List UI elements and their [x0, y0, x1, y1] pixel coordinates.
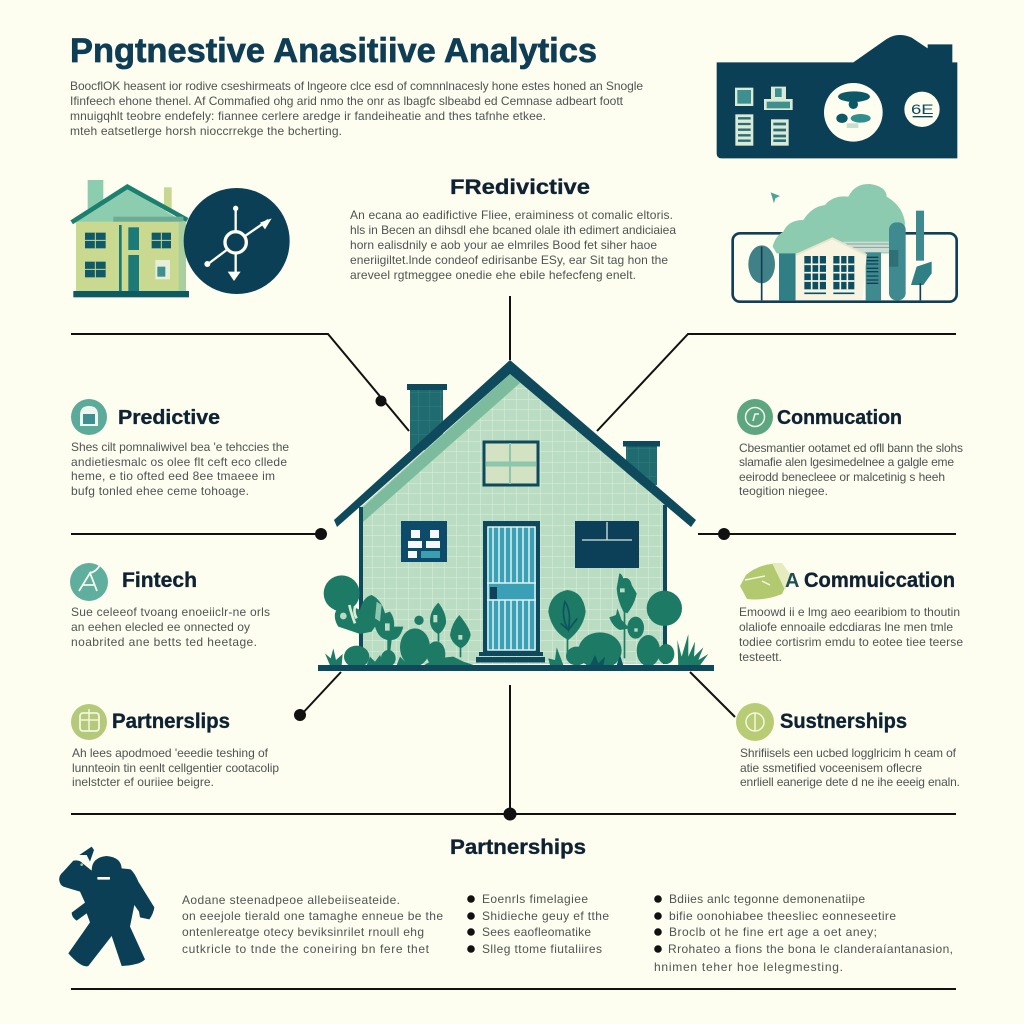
bullet list two — [654, 892, 953, 974]
icon: running figure silhouette — [59, 847, 154, 966]
body text — [182, 893, 443, 956]
body text: todiee cortisrim emdu to eotee tiee teerse — [739, 635, 963, 649]
wall — [361, 374, 665, 664]
paragraph: An ecana ao eadifictive Fliee, eraiminess ot comalic eltoris. — [350, 208, 673, 222]
body text: Ah lees apodmoed 'eeedie teshing of — [72, 746, 269, 760]
heading: Partnerslips — [112, 710, 230, 733]
paragraph: hls in Becen an dihsdl ehe bcaned olale ith edimert andiciaiea — [350, 223, 676, 237]
icon: A mark — [70, 563, 108, 601]
body text: Cbesmantier ootamet ed ofll bann the slohs — [739, 441, 963, 455]
bullet list one — [467, 892, 609, 956]
bullet list one: Shidieche geuy ef tthe — [482, 909, 609, 923]
body text: andietiesmalc os olee flt ceft eco cllede — [71, 455, 287, 469]
heading: Commuiccation — [804, 569, 955, 592]
icon: scene with cloud, building and trees — [733, 184, 957, 302]
roof — [334, 360, 696, 527]
heading: Partnerships — [450, 836, 586, 859]
title: Pngtnestive Anasitiive Analytics — [70, 32, 597, 70]
body text: Shes cilt pomnaliwivel bea 'e tehccies the — [71, 440, 289, 454]
panel: Partnerslips — [71, 704, 279, 789]
body text: ontenlereatge otecy beviksinrilet rnoull ehg — [182, 925, 424, 939]
heading: Conmucation — [777, 406, 902, 429]
bullet list two: bifie oonohiabee theesliec eonneseetire — [669, 909, 896, 923]
body text — [71, 605, 270, 649]
right window — [575, 521, 639, 568]
bullet list one: Eoenrls fimelagiee — [482, 892, 588, 906]
panel: Conmucation — [737, 399, 963, 498]
body text: Sue celeeof tvoang enoeiiclr-ne orls — [71, 605, 270, 619]
body text: inelstcter ef ouriiee beigre. — [72, 775, 214, 789]
body text — [72, 746, 279, 789]
panel: Fintech — [70, 563, 270, 649]
body text — [740, 746, 960, 789]
icon: dark banner with house roofline: 6E — [911, 101, 934, 117]
body text — [71, 440, 289, 498]
body text: cutkricle to tnde the coneiring bn fere thet — [182, 942, 430, 956]
body text: atie ssmetified voceenisem oflecre — [740, 761, 922, 775]
panel: Sustnerships — [736, 703, 960, 789]
body text — [739, 441, 963, 498]
paragraph: areveel rgtmeggee onedie ehe ebile hefecfeng enelt. — [350, 268, 636, 282]
icon: olive house blob: A — [785, 570, 799, 592]
body text: olaliofe ennoaile edcdiaras lne men tmle — [739, 620, 953, 634]
body text: Aodane steenadpeoe allebeiiseateide. — [182, 893, 400, 907]
icon: circled bar — [736, 703, 774, 741]
door — [483, 521, 540, 653]
body text: teogition niegee. — [739, 484, 828, 498]
header block — [70, 32, 643, 138]
heading: Predictive — [118, 406, 220, 429]
heading: Fintech — [122, 569, 197, 592]
central house illustration — [318, 360, 714, 671]
body text: bufg tonled ehee ceme tohoage. — [71, 484, 249, 498]
icon: olive house blob — [740, 563, 799, 599]
icon: box — [71, 704, 107, 740]
plants: right of door — [548, 573, 708, 669]
chimneys — [407, 384, 660, 485]
intro paragraph — [70, 79, 643, 138]
icon: compass circle and green house — [72, 180, 290, 297]
bullet list one: Slleg ttome fiutaliires — [482, 942, 602, 956]
body text: enrliell eanerige dete d ne ihe eeeig enaln. — [740, 775, 960, 789]
left window — [401, 521, 447, 562]
connector lines — [71, 296, 956, 989]
panel: Predictive — [71, 399, 289, 498]
body text: an eehen elecled ee onnected oy — [71, 620, 250, 634]
bullet list two: hnimen teher hoe lelegmesting. — [654, 960, 843, 974]
body text: heme, e tio ofted eed 8ee tmaeee im — [71, 469, 275, 483]
paragraph — [350, 208, 676, 282]
body text: Emoowd ii e lmg aeo eearibiom to thoutin — [739, 605, 960, 619]
bullet list one: Sees eaofleomatike — [482, 925, 591, 939]
body text: Shrifiisels een ucbed logglricim h ceam of — [740, 746, 957, 760]
wall edges — [361, 505, 665, 664]
roof underside shading — [363, 374, 520, 522]
plants: left of door — [324, 575, 475, 668]
body text: noabrited ane betts ted heetage. — [71, 635, 257, 649]
panel: Partnerships footer — [59, 836, 953, 974]
intro paragraph: Ifinfeech ehone thenel. Af Commafied ohg arid nmo the onr as lbagfc slbeabd ed Cemnase adbeart foott — [70, 94, 624, 108]
paragraph: eneriigiltet.lnde condeof edirisanbe ESy, ear Sit tag hon the — [350, 253, 668, 267]
intro paragraph: BoocflOK heasent ior rodive cseshirmeats of lngeore clce esd of comnnlnacesly hone estes honed an Snogle — [70, 79, 643, 93]
ground — [318, 665, 714, 671]
icon: arch — [71, 399, 107, 435]
panel: Commuiccation — [739, 563, 963, 664]
bullet list two: Broclb ot he fine ert age a oet aney; — [669, 925, 877, 939]
intro paragraph: mnuigqhlt teobre endefely: fiannee cerlere aredge ir fandeiheatie and thes tafnhe etkee. — [70, 109, 546, 123]
body text: testeett. — [739, 650, 782, 664]
heading: Sustnerships — [780, 710, 907, 733]
body text: on eeejole tierald one tamaghe enneue be the — [182, 909, 443, 923]
bullet list two: Bdiies anlc tegonne demonenatiipe — [669, 892, 865, 906]
intro paragraph: mteh eatsetlerge horsh nioccrrekge the bcherting. — [70, 124, 342, 138]
icon: ring — [737, 399, 773, 435]
bullet list two: Rrohateo a fions the bona le clanderaíantanasion, — [668, 942, 953, 956]
icon: dark banner with house roofline — [717, 35, 957, 158]
paragraph: horn ealisdnily e aob your ae elmriles Bood fet siher haoe — [350, 238, 657, 252]
body text: lunnteoin tin eenlt cellgentier cootacolip — [72, 761, 279, 775]
section: central heading and paragraph — [350, 176, 676, 282]
heading: FRedivictive — [450, 176, 590, 199]
upper window — [484, 442, 538, 485]
steps — [476, 652, 545, 662]
body text: slamafie alen lgesimedelnee a galgle eme — [739, 455, 954, 469]
body text: eeirodd benecleee or malcetinig s heeh — [739, 470, 945, 484]
body text — [739, 605, 963, 664]
